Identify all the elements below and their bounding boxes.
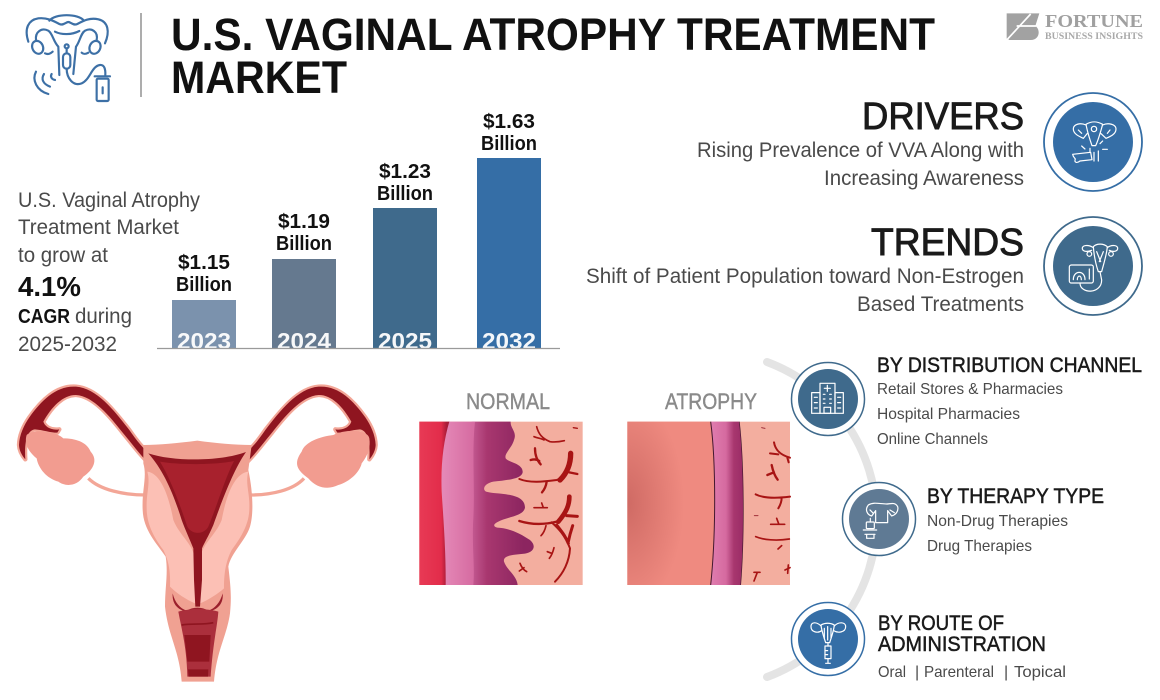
bar: 2025: $1.23 (379, 161, 431, 183)
icon: header uterus with ultrasound probe (27, 15, 110, 101)
panel: by therapy type: BY THERAPY TYPE (927, 485, 1104, 508)
text block: CAGR statement: 4.1% (18, 271, 81, 302)
logo: Fortune Business Insights: FORTUNE (1045, 11, 1143, 31)
blood vessels (519, 427, 577, 582)
text block: CAGR statement: during (75, 305, 132, 328)
bar: 2032 (477, 111, 541, 354)
bar: 2024: 2024 (277, 328, 331, 354)
bar: 2032: $1.63 (483, 111, 535, 133)
vaginal canal (178, 609, 218, 677)
bar: 2025 (373, 161, 437, 354)
panel: drivers (697, 96, 1024, 190)
label: atrophy: ATROPHY (665, 389, 757, 414)
panel: by route of administration (878, 612, 1066, 681)
panel: by distribution channel: Retail Stores & Pharmacies (877, 381, 1063, 398)
panel: by route of administration: Parenteral (924, 664, 994, 681)
uterine body (143, 441, 252, 682)
inner wall (147, 472, 195, 603)
panel: by therapy type (927, 485, 1104, 555)
panel: trends: Shift of Patient Population toward Non-Estrogen (586, 265, 1024, 288)
panel: by distribution channel: Online Channels (877, 431, 988, 448)
bar: 2032: Billion (481, 133, 537, 155)
panel: by therapy type: Non-Drug Therapies (927, 513, 1068, 530)
bar: 2024 (272, 211, 336, 354)
title: U.S. VAGINAL ATROPHY TREATMENT (171, 9, 935, 60)
bar: 2023: Billion (176, 274, 232, 296)
title: MARKET (171, 52, 347, 103)
text block: CAGR statement: 2025-2032 (18, 333, 117, 356)
panel: by route of administration: Topical (1014, 664, 1066, 681)
panel: drivers: DRIVERS (862, 96, 1024, 138)
panel: trends: TRENDS (871, 222, 1024, 264)
text block: CAGR statement: CAGR (18, 306, 70, 328)
icon: therapy (842, 482, 916, 556)
ligaments (88, 478, 147, 495)
bar: 2023: 2023 (177, 328, 231, 354)
fallopian tubes (19, 387, 376, 463)
bar: 2025: 2025 (378, 328, 432, 354)
bar: 2024: $1.19 (278, 211, 330, 233)
bar: 2023: $1.15 (178, 252, 230, 274)
logo: Fortune Business Insights: BUSINESS INSIGHTS (1045, 32, 1143, 42)
decorative arc (767, 362, 877, 677)
label: normal: NORMAL (466, 389, 550, 414)
panel: by route of administration: ADMINISTRATION (878, 633, 1046, 656)
panel: by distribution channel (877, 354, 1142, 448)
panel: drivers: Increasing Awareness (824, 167, 1024, 190)
title (171, 9, 935, 103)
text block: CAGR statement: U.S. Vaginal Atrophy (18, 189, 200, 212)
icon: route of administration (792, 602, 864, 676)
uterus illustration (19, 387, 376, 682)
divider (140, 13, 142, 97)
bar chart: market size (157, 111, 560, 354)
illustration: normal tissue (419, 422, 583, 585)
icon: hospital (792, 362, 864, 436)
uterine cavity (148, 452, 246, 607)
text block: CAGR statement (18, 189, 200, 356)
icon: drivers circle (1044, 93, 1142, 191)
bar: 2025: Billion (377, 183, 433, 205)
panel: by route of administration: | (915, 664, 919, 681)
logo: Fortune Business Insights (1007, 11, 1143, 42)
illustration: atrophy tissue (627, 422, 790, 585)
panel: by route of administration: | (1004, 664, 1008, 681)
panel: drivers: Rising Prevalence of VVA Along with (697, 139, 1024, 162)
panel: trends: Based Treatments (857, 293, 1024, 316)
panel: by route of administration: BY ROUTE OF (878, 612, 1004, 635)
panel: trends (586, 222, 1024, 316)
fornix (173, 593, 223, 612)
bar: 2024: Billion (276, 233, 332, 255)
text block: CAGR statement: to grow at (18, 244, 108, 267)
icon: trends circle (1044, 217, 1142, 315)
ovaries (26, 431, 94, 485)
blood vessels (754, 428, 790, 581)
bar: 2023 (172, 252, 236, 354)
panel: by distribution channel: BY DISTRIBUTION CHANNEL (877, 354, 1142, 377)
text block: CAGR statement: Treatment Market (18, 216, 179, 239)
panel: by therapy type: Drug Therapies (927, 538, 1032, 555)
panel: by distribution channel: Hospital Pharmacies (877, 406, 1020, 423)
bar: 2032: 2032 (482, 328, 536, 354)
panel: by route of administration: Oral (878, 664, 906, 681)
